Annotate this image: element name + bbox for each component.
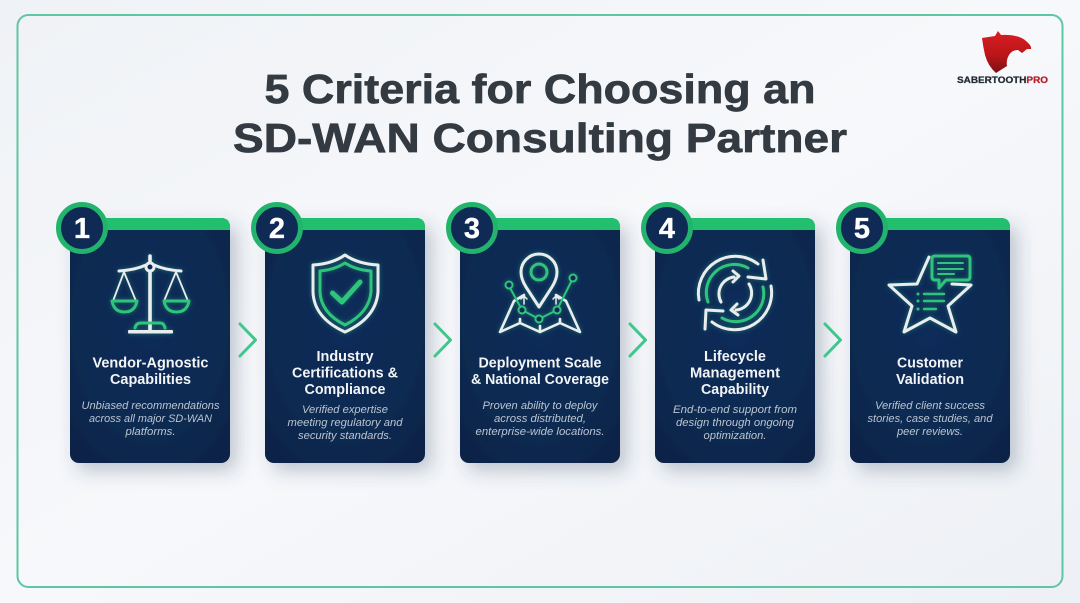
description 1 (82, 400, 220, 438)
icon: map with pin (500, 254, 580, 332)
heading 2: Compliance (304, 382, 386, 398)
heading 3: Deployment Scale (478, 356, 602, 372)
icon: balance scales (112, 256, 189, 334)
description 5: Verified client success (875, 400, 986, 412)
badge 1 (58, 204, 106, 252)
badge 4: 4 (659, 213, 675, 245)
panel: card 5 customer validation (838, 204, 1010, 463)
description 1: across all major SD-WAN (89, 413, 212, 425)
badge 4 (644, 204, 690, 252)
description 1: platforms. (124, 426, 176, 438)
badge 3: 3 (464, 213, 480, 245)
heading 4 (690, 349, 780, 398)
description 2 (288, 404, 403, 442)
logo: Sabertooth Pro (957, 31, 1048, 86)
panel: card 4 lifecycle (644, 204, 815, 463)
description 4: End-to-end support from (673, 404, 797, 416)
description 5: stories, case studies, and (868, 413, 993, 425)
panel: card 2 certifications (254, 204, 425, 463)
description 2: security standards. (298, 430, 392, 442)
heading 5: Validation (896, 372, 964, 388)
heading 5 (896, 356, 964, 388)
description 5: peer reviews. (896, 426, 963, 438)
description 3: Proven ability to deploy (482, 400, 599, 412)
icon: lifecycle arrows (698, 256, 772, 330)
panel: card 1 vendor-agnostic (58, 204, 230, 463)
arrow 2 (435, 324, 450, 356)
description 1: Unbiased recommendations (82, 400, 220, 412)
badge 2 (254, 204, 300, 252)
badge 5 (838, 204, 886, 252)
heading 3: & National Coverage (471, 372, 609, 388)
heading 3 (471, 356, 609, 388)
description 4: optimization. (704, 430, 766, 442)
heading 2: Certifications & (292, 366, 399, 382)
heading 1: Vendor-Agnostic (92, 356, 208, 372)
title: SD-WAN Consulting Partner (233, 115, 847, 161)
title: 5 Criteria for Choosing an (264, 66, 816, 112)
heading 4: Lifecycle (704, 349, 766, 365)
heading 4: Management (690, 366, 780, 382)
heading 1: Capabilities (110, 372, 191, 388)
description 3 (476, 400, 604, 438)
arrow 3 (630, 324, 646, 356)
badge 5: 5 (854, 213, 870, 245)
icon: star with speech bubble (889, 256, 971, 332)
title (233, 66, 847, 161)
description 2: meeting regulatory and (288, 417, 403, 429)
description 4 (673, 404, 797, 442)
icon: shield with check (313, 255, 378, 332)
description 4: design through ongoing (676, 417, 795, 429)
description 2: Verified expertise (302, 404, 388, 416)
panel: card 3 deployment (448, 204, 620, 463)
description 5 (868, 400, 993, 438)
heading 1 (92, 356, 208, 388)
badge 2: 2 (269, 213, 285, 245)
description 3: across distributed, (494, 413, 586, 425)
heading 2: Industry (316, 349, 374, 365)
badge 1: 1 (74, 213, 90, 245)
arrow 1 (240, 324, 256, 356)
badge 3 (448, 204, 496, 252)
logo: Sabertooth Pro: SABERTOOTH PRO (957, 75, 1048, 86)
description 3: enterprise-wide locations. (476, 426, 604, 438)
arrow 4 (825, 324, 840, 356)
heading 5: Customer (897, 356, 963, 372)
heading 2 (292, 349, 399, 398)
heading 4: Capability (701, 382, 769, 398)
